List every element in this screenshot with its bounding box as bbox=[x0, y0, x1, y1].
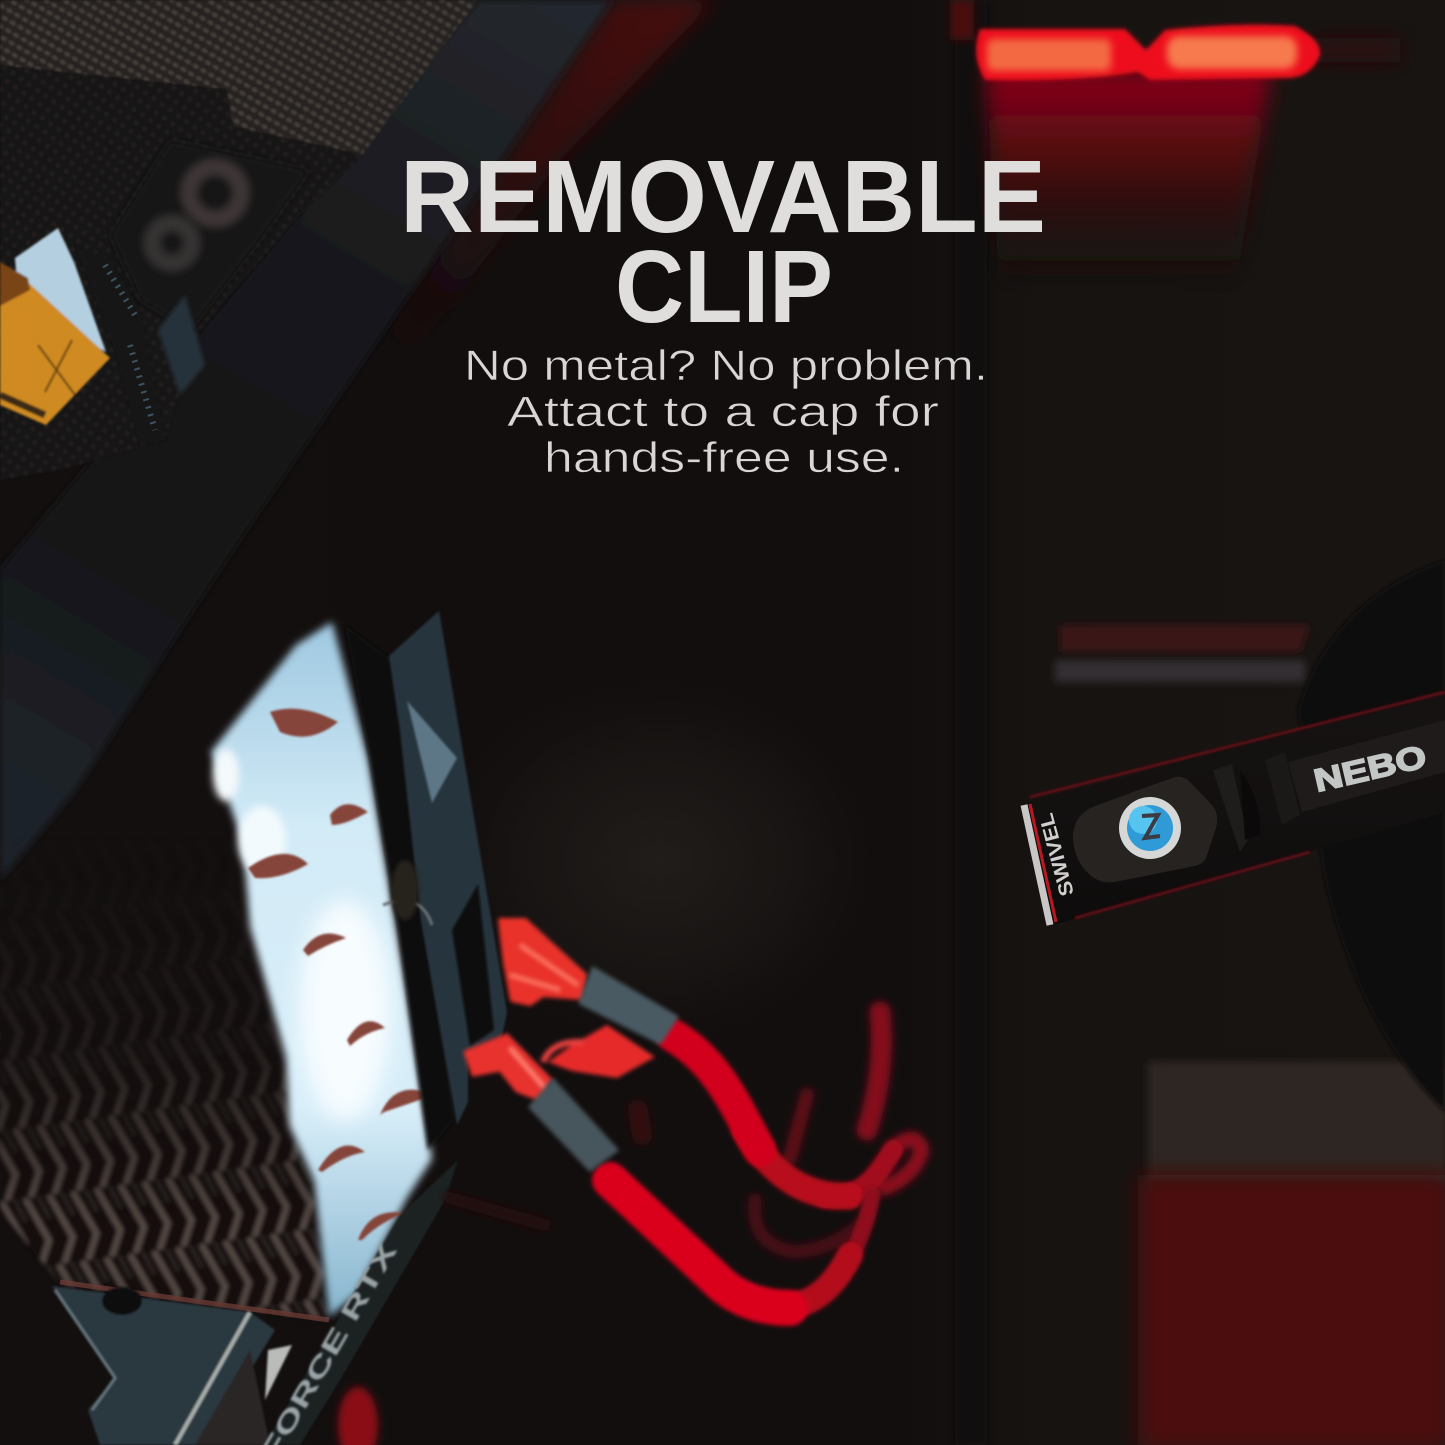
logo stripe bbox=[1288, 720, 1445, 812]
red tail light bbox=[976, 25, 1400, 290]
speckled fabric bbox=[75, 245, 165, 445]
title: REMOVABLE bbox=[400, 139, 1046, 254]
lower sleeve bbox=[530, 1080, 617, 1170]
black cap behind flashlight bbox=[1298, 560, 1445, 1112]
base plate bbox=[52, 1286, 292, 1445]
heatsink fins bbox=[0, 970, 330, 1322]
lower left blurred red element bbox=[338, 1387, 378, 1445]
upper connector bbox=[500, 920, 585, 1004]
far background cable strands bbox=[450, 1012, 881, 1252]
flashlight bbox=[1022, 692, 1445, 926]
dark strip with wires bbox=[345, 625, 455, 1150]
carbon panel bbox=[0, 66, 362, 480]
mesh panel top left bbox=[0, 0, 478, 480]
background: blurred middle smear bbox=[430, 670, 890, 1050]
lower connector bbox=[465, 1035, 551, 1101]
subtitle text: hands-free use. bbox=[544, 434, 904, 482]
power button bbox=[1119, 797, 1181, 859]
subtitle text: Attact to a cap for bbox=[507, 388, 939, 436]
button plate bbox=[1073, 777, 1217, 882]
red body highlights bbox=[1030, 692, 1445, 918]
dark frame with cutout bbox=[383, 611, 507, 1125]
red wedge behind title bbox=[365, 0, 715, 360]
slate tab bbox=[158, 295, 205, 395]
swivel label: SWIVEL bbox=[1036, 811, 1079, 898]
small middle connector bbox=[543, 1025, 655, 1078]
subtitle text bbox=[464, 342, 988, 482]
blurred ring screw holes bbox=[189, 167, 241, 219]
warning sticker bbox=[0, 228, 110, 425]
diagonal frame band bbox=[0, 0, 612, 880]
background: red floor block bbox=[1138, 1062, 1445, 1445]
background: grey shelf with red dots bbox=[1055, 625, 1310, 682]
rivets bbox=[248, 709, 434, 1240]
NEBO logo: NEBO bbox=[1310, 738, 1430, 799]
lower red cable bbox=[610, 1180, 872, 1308]
flashlight body bbox=[1022, 692, 1445, 926]
bright metal plate bbox=[211, 622, 432, 1317]
clip swivel joint bbox=[1213, 752, 1300, 852]
red cables bbox=[338, 920, 922, 1445]
subtitle text: No metal? No problem. bbox=[464, 342, 988, 390]
lens ring bbox=[1024, 804, 1056, 925]
title bbox=[400, 139, 1046, 344]
upper sleeve bbox=[580, 968, 677, 1043]
upper red cable bbox=[672, 1035, 922, 1198]
background: dark vertical post bbox=[950, 0, 987, 1445]
card edge with lettering bbox=[254, 1160, 458, 1445]
title: CLIP bbox=[615, 229, 833, 344]
